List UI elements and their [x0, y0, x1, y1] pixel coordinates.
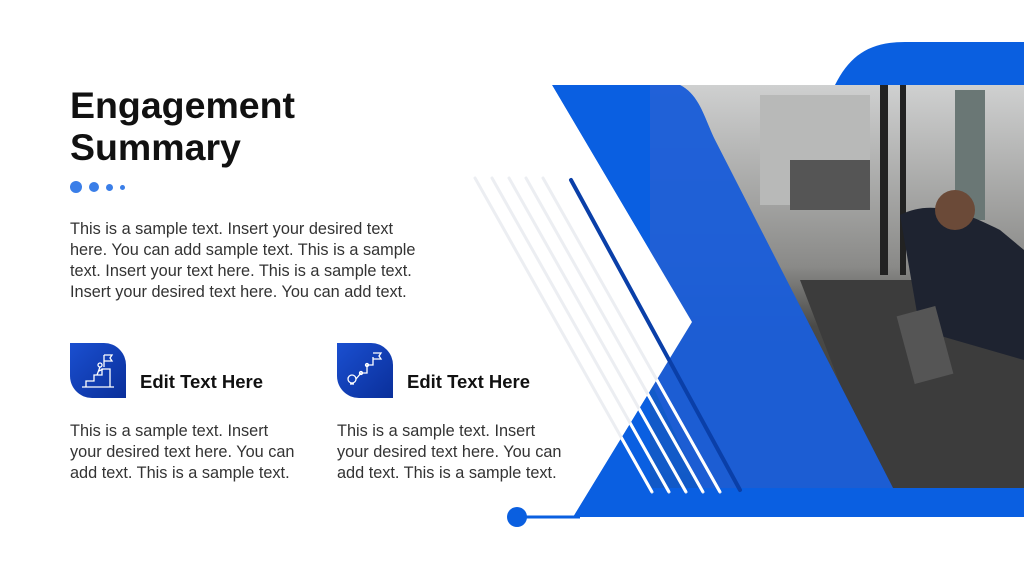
white cut [540, 85, 692, 517]
text: add text. This is a sample text. [337, 464, 557, 482]
decorative dots [70, 181, 125, 193]
heading: Edit Text Here [140, 371, 263, 392]
title [70, 84, 295, 168]
white stripes inside blue area [620, 378, 722, 493]
icon: idea to goal path [337, 343, 393, 398]
text: add text. This is a sample text. [70, 464, 290, 482]
photo [650, 85, 1024, 488]
heading: Edit Text Here [407, 371, 530, 392]
item 2 [337, 343, 561, 482]
text: This is a sample text. Insert [70, 422, 268, 440]
main blue chevron [552, 85, 1024, 517]
top right cap [835, 42, 1024, 85]
intro text: This is a sample text. Insert your desired text here. You can add sample text. This is a sample text. Insert your text here. This is a sample text. Insert your desired text here. You can add text. [70, 220, 415, 301]
text: your desired text here. You can [70, 443, 294, 461]
title: Summary [70, 126, 241, 168]
diagonal stripes [475, 178, 740, 492]
text: This is a sample text. Insert [337, 422, 535, 440]
item 1 [70, 343, 294, 482]
text [337, 422, 561, 482]
title: Engagement [70, 84, 295, 126]
connector dot and line [507, 507, 527, 527]
text: your desired text here. You can [337, 443, 561, 461]
translucent blue overlay [552, 85, 1024, 517]
text [70, 422, 294, 482]
icon: climbing stairs with flag [70, 343, 126, 398]
